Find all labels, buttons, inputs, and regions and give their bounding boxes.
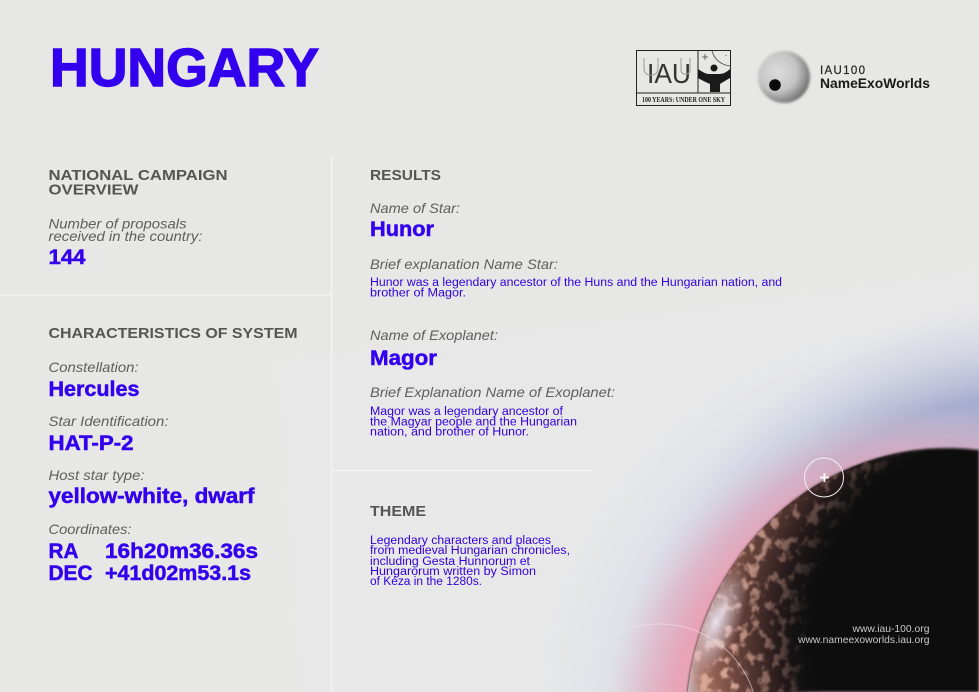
label: number of proposals: received in the country:	[48, 228, 203, 244]
panel: national campaign overview	[48, 167, 228, 269]
label: star identification: Star Identification:	[48, 413, 169, 429]
IAU logo	[636, 50, 730, 106]
text: theme description: Legendary characters and places	[370, 535, 551, 547]
dividers	[0, 155, 592, 692]
thin arc	[567, 624, 753, 692]
value: Hercules: Hercules	[48, 378, 140, 401]
website links: www.iau-100.org	[852, 623, 930, 635]
label: name of exoplanet: Name of Exoplanet:	[370, 327, 498, 343]
label: brief explanation name star: Brief explanation Name Star:	[370, 256, 558, 272]
heading: characteristics of system: CHARACTERISTICS OF SYSTEM	[48, 325, 298, 342]
label: host star type: Host star type:	[48, 467, 145, 483]
website links: www.nameexoworlds.iau.org	[797, 634, 930, 646]
value: RA: 16h20m36.36s	[105, 540, 258, 563]
planet with atmosphere glow	[602, 326, 979, 692]
text: star explanation: brother of Magor.	[370, 288, 466, 300]
value: 144: 144	[48, 246, 86, 269]
text: star explanation: Hunor was a legendary ancestor of the Huns and the Hungarian nation, and	[370, 277, 782, 289]
hotspot marker	[804, 458, 844, 497]
NameExoWorlds logo: IAU100	[820, 65, 865, 77]
text: exoplanet explanation: nation, and brother of Hunor.	[370, 426, 529, 438]
panel: theme	[370, 503, 570, 588]
value: Hunor: Hunor	[370, 218, 434, 241]
light background panel	[278, 270, 979, 692]
heading: national campaign overview: OVERVIEW	[48, 182, 139, 198]
NameExoWorlds logo: NameExoWorlds	[820, 75, 930, 91]
title: HUNGARY	[50, 38, 319, 98]
IAU logo: IAU	[647, 58, 691, 89]
value: RA: RA	[48, 540, 78, 563]
NameExoWorlds logo	[758, 51, 930, 103]
IAU logo: 100 YEARS: UNDER ONE SKY	[642, 95, 725, 104]
value: Magor: Magor	[370, 347, 437, 370]
heading: national campaign overview: NATIONAL CAMPAIGN	[48, 167, 228, 184]
label: number of proposals: Number of proposals	[48, 216, 186, 232]
label: name of star: Name of Star:	[370, 200, 460, 216]
text: exoplanet explanation: Magor was a legendary ancestor of	[370, 406, 564, 418]
label: coordinates: Coordinates:	[48, 521, 132, 537]
panel: characteristics of system	[48, 325, 298, 585]
value: HAT-P-2: HAT-P-2	[48, 432, 134, 455]
label: brief explanation name of exoplanet: Brief Explanation Name of Exoplanet:	[370, 384, 615, 400]
text: theme description: including Gesta Hunnorum et	[370, 556, 531, 568]
heading: results: RESULTS	[370, 167, 441, 184]
value: DEC: DEC	[48, 562, 92, 585]
panel: results	[370, 167, 782, 438]
text: exoplanet explanation: the Magyar people and the Hungarian	[370, 416, 577, 428]
value: DEC: +41d02m53.1s	[105, 562, 251, 585]
heading: theme: THEME	[370, 503, 426, 520]
value: yellow-white, dwarf: yellow-white, dwarf	[48, 485, 256, 508]
text: theme description: from medieval Hungarian chronicles,	[370, 545, 570, 557]
label: constellation: Constellation:	[48, 359, 139, 375]
text: theme description: of Kéza in the 1280s.	[370, 576, 482, 588]
text: theme description: Hungarorum written by Simon	[370, 566, 536, 578]
